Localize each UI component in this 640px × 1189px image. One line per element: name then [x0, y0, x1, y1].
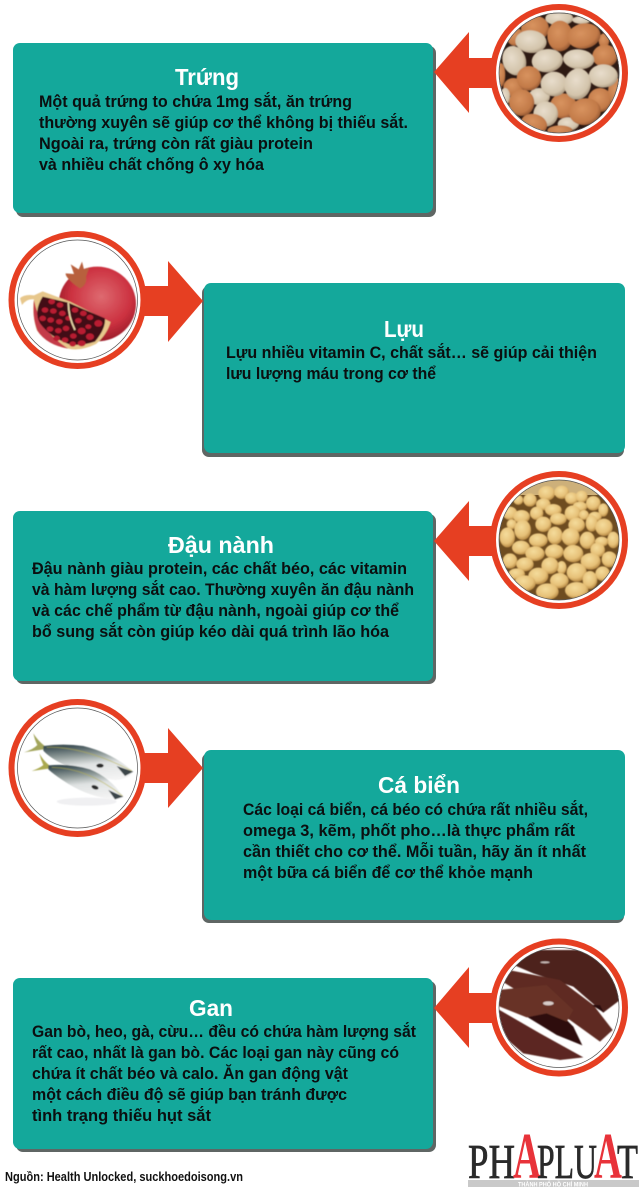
- icon: eggs: [493, 7, 627, 139]
- text block: Trứng: Ngoài ra, trứng còn rất giàu protein: [39, 135, 313, 153]
- text block: Đậu nành: Đậu nành giàu protein, các chất béo, các vitamin: [32, 560, 407, 578]
- logo: Pháp Luật: THÀNH PHỐ HỒ CHÍ MINH: [518, 1180, 588, 1188]
- text block: Đậu nành: và các chế phẩm từ đậu nành, ngoài giúp cơ thể: [32, 602, 399, 620]
- text block: Trứng: [39, 92, 408, 174]
- panel: Cá biển: [202, 750, 625, 923]
- logo: Pháp Luật: PH: [468, 1134, 515, 1189]
- logo: Pháp Luật: [468, 1120, 639, 1189]
- text block: Cá biển: Các loại cá biển, cá béo có chứa rất nhiều sắt,: [243, 800, 588, 819]
- heading: Gan: Gan: [189, 995, 233, 1021]
- section: Trứng: [13, 7, 627, 217]
- text block: Gan: rất cao, nhất là gan bò. Các loại gan này cũng có: [32, 1044, 399, 1062]
- text block: Đậu nành: [32, 560, 414, 641]
- heading: Đậu nành: Đậu nành: [168, 532, 274, 558]
- text block: Gan: một cách điều độ sẽ giúp bạn tránh được: [32, 1086, 347, 1104]
- text block: Trứng: và nhiều chất chống ô xy hóa: [39, 156, 265, 174]
- section: Lựu: [5, 234, 639, 1189]
- text block: Gan: Gan bò, heo, gà, cừu… đều có chứa hàm lượng sắt: [32, 1022, 416, 1041]
- source note: Nguồn: Health Unlocked, suckhoedoisong.vn: [5, 1169, 243, 1184]
- text block: Trứng: thường xuyên sẽ giúp cơ thể không bị thiếu sắt.: [39, 113, 408, 132]
- icon: fish: [12, 702, 144, 834]
- arrow: Gan: [434, 967, 497, 1048]
- logo: Pháp Luật: PLU: [537, 1134, 597, 1189]
- section: Đậu nành: [13, 474, 625, 684]
- section: Cá biển: [12, 702, 625, 923]
- text block: Gan: [32, 1022, 416, 1125]
- panel: Lựu: [202, 283, 625, 457]
- text block: Đậu nành: bổ sung sắt còn giúp kéo dài quá trình lão hóa: [32, 622, 390, 641]
- section: Gan: [13, 942, 625, 1152]
- text block: Cá biển: cần thiết cho cơ thể. Mỗi tuần, hãy ăn ít nhất: [243, 842, 586, 861]
- heading: Trứng: Trứng: [175, 64, 239, 90]
- arrow: Cá biển: [142, 728, 203, 808]
- text block: Lựu: [226, 343, 597, 383]
- icon: pomegranate: [12, 234, 144, 366]
- icon: soybeans: [493, 474, 625, 606]
- text block: Gan: tình trạng thiếu hụt sắt: [32, 1106, 211, 1125]
- text block: Cá biển: một bữa cá biển để cơ thể khỏe mạnh: [243, 864, 533, 882]
- panel: Gan: [13, 978, 436, 1152]
- text block: Đậu nành: và hàm lượng sắt cao. Thường xuyên ăn đậu nành: [32, 580, 414, 599]
- text block: Lựu: lưu lượng máu trong cơ thể: [226, 365, 436, 383]
- text block: Gan: chứa ít chất béo và calo. Ăn gan động vật: [32, 1064, 348, 1083]
- text block: Lựu: Lựu nhiều vitamin C, chất sắt… sẽ giúp cải thiện: [226, 343, 597, 362]
- panel: Đậu nành: [13, 511, 436, 684]
- arrow: Đậu nành: [434, 501, 497, 581]
- text block: Cá biển: omega 3, kẽm, phốt pho…là thực phẩm rất: [243, 822, 575, 840]
- text block: Cá biển: [243, 800, 588, 882]
- text block: Trứng: Một quả trứng to chứa 1mg sắt, ăn trứng: [39, 92, 352, 111]
- arrow: Trứng: [434, 32, 497, 113]
- heading: Cá biển: Cá biển: [378, 772, 460, 798]
- icon: liver: [493, 942, 625, 1074]
- heading: Lựu: Lựu: [384, 316, 424, 342]
- arrow: Lựu: [142, 261, 203, 342]
- panel: Trứng: [13, 43, 436, 217]
